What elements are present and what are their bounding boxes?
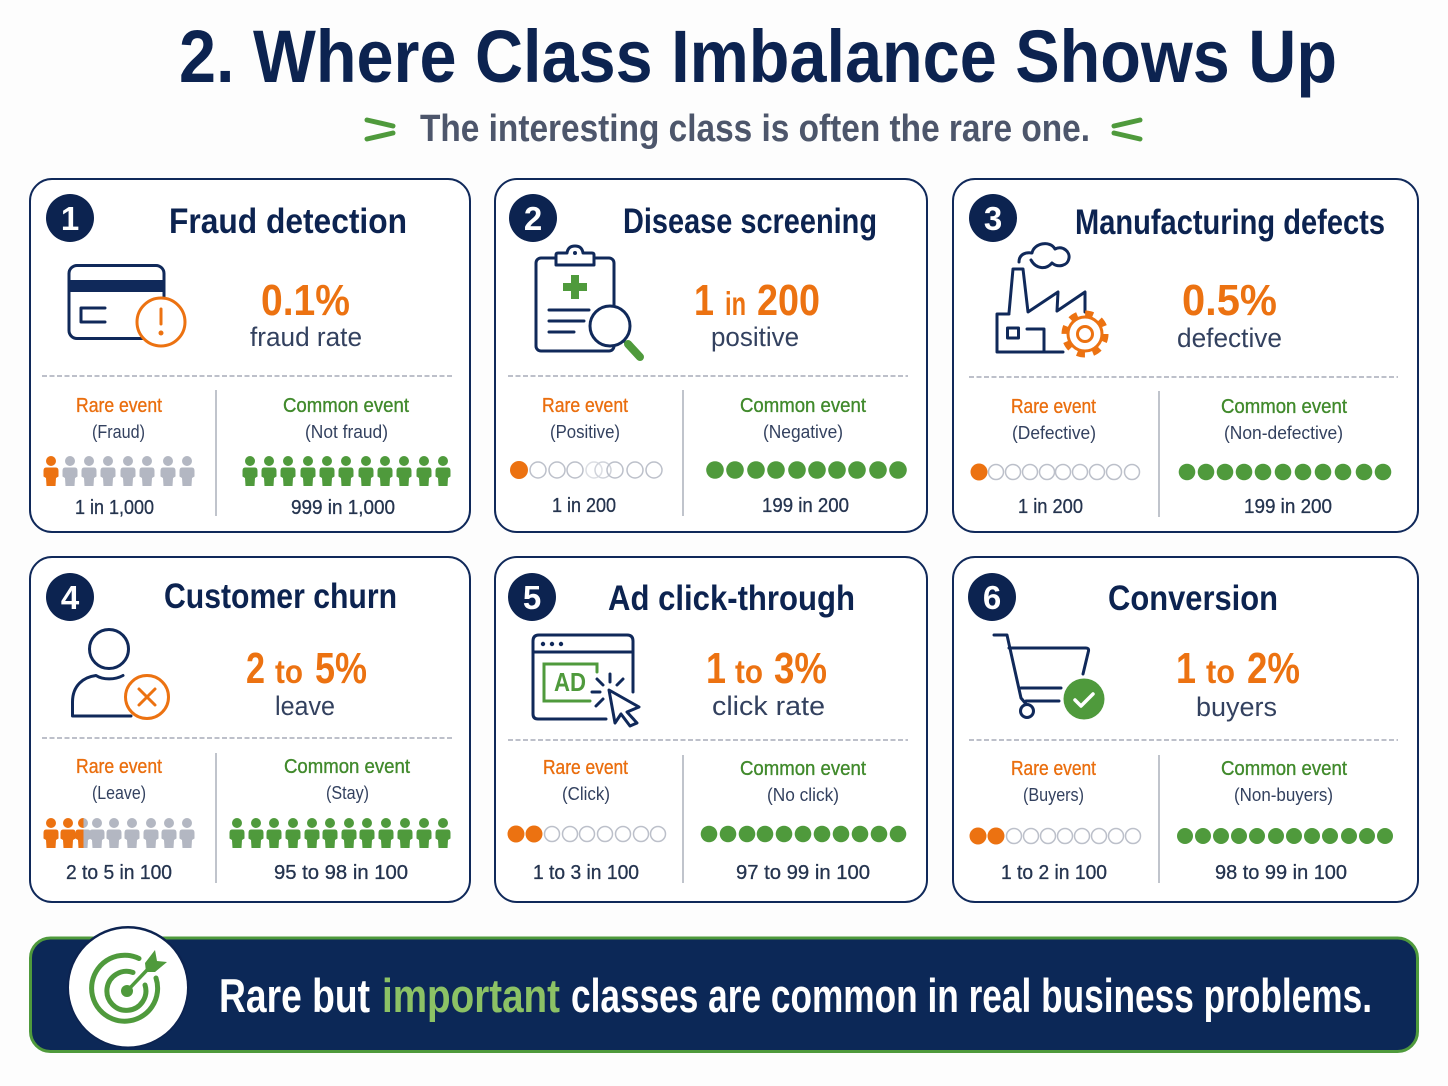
number badge 1 [46, 194, 94, 242]
rare event sublabel: (Buyers) [1023, 785, 1084, 805]
stat: 2 to 5%: 5% [315, 644, 367, 693]
number badge 4 [46, 573, 94, 621]
heading: ad click-through: Ad click-through [608, 579, 855, 618]
stat label: click rate [712, 691, 825, 721]
common event label: Common event [283, 395, 409, 417]
common event sublabel: (Stay) [326, 783, 369, 803]
common count: 199 in 200 [762, 495, 849, 517]
panel: disease screening [495, 179, 927, 532]
panel: ad click-through [495, 557, 927, 902]
heading: customer churn: Customer churn [164, 577, 397, 616]
stat: 2 to 5%: 2 [246, 644, 265, 693]
number badge 5 [508, 573, 556, 621]
stat: 0.5%: 0.5% [1182, 276, 1277, 325]
heading: fraud detection: Fraud detection [169, 202, 407, 241]
rare dots [970, 464, 1140, 480]
common count: 95 to 98 in 100 [274, 862, 408, 884]
rare event label: Rare event [542, 395, 628, 417]
common event sublabel: (No click) [767, 785, 839, 805]
common dots [1179, 464, 1391, 480]
common event sublabel: (Negative) [763, 422, 843, 442]
common count: 999 in 1,000 [291, 497, 395, 519]
stat: 1 in 200: 200 [757, 276, 820, 325]
stat label: buyers [1196, 692, 1277, 722]
common pictogram [230, 818, 450, 848]
heading: manufacturing defects: Manufacturing defects [1075, 203, 1385, 242]
number badge 5: 5 [523, 579, 541, 616]
common event label: Common event [740, 758, 866, 780]
rare pictogram [44, 818, 194, 848]
common event label: Common event [1221, 396, 1347, 418]
rare dots [508, 826, 666, 842]
icon: ad browser window with cursor: AD [554, 667, 586, 697]
rare event label: Rare event [543, 757, 628, 779]
stat: 2 to 5%: to [275, 653, 303, 690]
stat: 1 to 3%: 1 [706, 644, 726, 693]
common dots [701, 826, 906, 842]
callout banner [30, 926, 1418, 1052]
common dots [706, 461, 907, 479]
stat: 1 in 200: in [725, 285, 746, 322]
title: 2. Where Class Imbalance Shows Up [179, 15, 1337, 98]
number badge 2 [509, 194, 557, 242]
icon: person with x [72, 630, 168, 718]
number badge 4: 4 [61, 579, 80, 616]
rare count: 2 to 5 in 100 [66, 862, 172, 884]
banner message [219, 969, 1372, 1022]
rare event sublabel: (Positive) [550, 422, 620, 442]
common dots [1177, 828, 1393, 844]
common event sublabel: (Not fraud) [305, 422, 388, 442]
stat label: positive [711, 322, 799, 352]
rare count: 1 to 3 in 100 [533, 862, 639, 884]
icon: factory with gear [997, 244, 1106, 354]
icon: target with arrow [67, 926, 189, 1048]
common count: 97 to 99 in 100 [736, 862, 870, 884]
icon: left chevron accent [367, 120, 393, 139]
rare event sublabel: (Defective) [1012, 423, 1096, 443]
common event sublabel: (Non-defective) [1224, 423, 1343, 443]
heading: conversion: Conversion [1108, 579, 1278, 618]
rare event label: Rare event [1011, 396, 1096, 418]
heading: disease screening: Disease screening [623, 202, 877, 241]
stat: 1 to 2%: 2% [1247, 644, 1300, 693]
stat: 1 to 3%: to [735, 653, 763, 690]
common count: 98 to 99 in 100 [1215, 862, 1347, 884]
panel: conversion [953, 557, 1418, 902]
panel: fraud detection [30, 179, 470, 532]
rare count: 1 in 200 [1018, 496, 1083, 518]
number badge 6: 6 [983, 579, 1001, 616]
number badge 6 [968, 573, 1016, 621]
rare dots [970, 828, 1140, 844]
common count: 199 in 200 [1244, 496, 1332, 518]
banner message: important [382, 969, 560, 1022]
rare dots [510, 461, 662, 479]
common pictogram [242, 456, 450, 486]
icon: clipboard with magnifier [536, 246, 640, 357]
stat: 1 in 200: 1 [694, 276, 714, 325]
icon: right chevron accent [1114, 120, 1140, 139]
stat: 1 to 2%: to [1206, 653, 1235, 690]
stat label: fraud rate [250, 322, 362, 352]
number badge 3: 3 [984, 200, 1002, 237]
rare event label: Rare event [76, 395, 162, 417]
icon: shopping cart with check [994, 635, 1104, 720]
panel: manufacturing defects [953, 179, 1418, 532]
number badge 2: 2 [524, 200, 542, 237]
stat: 0.1%: 0.1% [261, 276, 350, 325]
rare event label: Rare event [1011, 758, 1096, 780]
stat: 1 to 2%: 1 [1176, 644, 1196, 693]
rare count: 1 to 2 in 100 [1001, 862, 1107, 884]
rare event sublabel: (Fraud) [92, 422, 145, 442]
stat label: leave [275, 691, 335, 721]
icon: ad browser window with cursor [533, 635, 639, 726]
rare event label: Rare event [76, 756, 162, 778]
rare pictogram [44, 456, 194, 486]
icon: credit card with alert [69, 266, 185, 346]
rare event sublabel: (Leave) [92, 783, 146, 803]
panel: customer churn [30, 557, 470, 902]
banner message: Rare but [219, 969, 370, 1022]
rare count: 1 in 200 [552, 495, 616, 517]
common event label: Common event [284, 756, 410, 778]
common event sublabel: (Non-buyers) [1234, 785, 1333, 805]
common event label: Common event [1221, 758, 1347, 780]
rare count: 1 in 1,000 [75, 497, 154, 519]
stat label: defective [1177, 323, 1282, 353]
number badge 1: 1 [61, 200, 79, 237]
common event label: Common event [740, 395, 866, 417]
number badge 3 [969, 194, 1017, 242]
subtitle: The interesting class is often the rare one. [420, 108, 1090, 150]
rare event sublabel: (Click) [562, 784, 610, 804]
stat: 1 to 3%: 3% [774, 644, 827, 693]
